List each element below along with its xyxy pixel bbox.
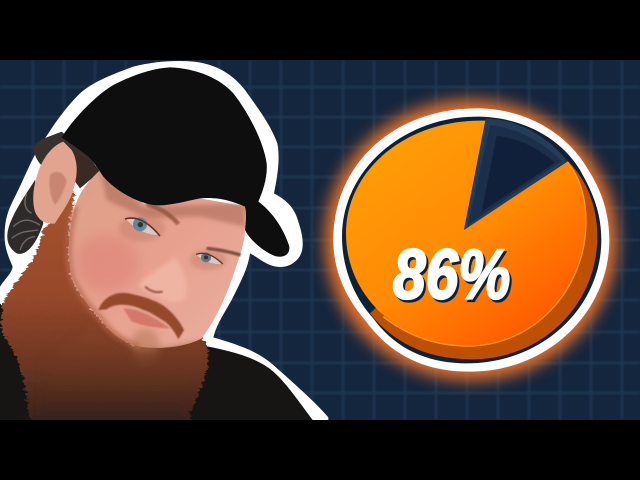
shirt: [0, 303, 313, 420]
hat shadow on forehead: [100, 170, 245, 227]
pie top face: [346, 121, 586, 346]
pie side depth: [370, 162, 597, 359]
background grid panel: [0, 60, 640, 420]
nostril: [145, 287, 163, 292]
pie chart badge: [325, 100, 617, 380]
right eye socket: [190, 250, 227, 270]
ear inner shadow: [49, 172, 67, 205]
hair behind ear: [7, 132, 100, 254]
pie highlight edge: [383, 162, 586, 346]
beard-to-cheek soft edge: [69, 207, 140, 347]
right eye: [196, 252, 223, 264]
cheek: [75, 235, 138, 292]
left eye socket: [118, 215, 165, 242]
beard: [1, 190, 208, 427]
top letterbox bar: [0, 0, 640, 60]
lower beard shading: [40, 327, 203, 420]
ear: [33, 142, 77, 224]
missing slice: [464, 118, 567, 230]
cap: [62, 67, 289, 257]
label shadow: 86%: [395, 237, 512, 316]
moustache: [98, 293, 184, 339]
eyebrows: [147, 204, 178, 224]
label: 86%: [393, 235, 510, 314]
lower lip: [123, 308, 170, 328]
bottom letterbox bar: [0, 420, 640, 480]
dark ring: [342, 117, 601, 363]
white outline: [333, 108, 609, 372]
face: [69, 170, 247, 348]
left eye: [125, 217, 160, 236]
nose: [139, 257, 187, 302]
orange glow: [325, 100, 617, 380]
person cutout: [0, 61, 328, 427]
chin whiskers: [130, 328, 160, 365]
white sticker outline: [0, 61, 328, 420]
